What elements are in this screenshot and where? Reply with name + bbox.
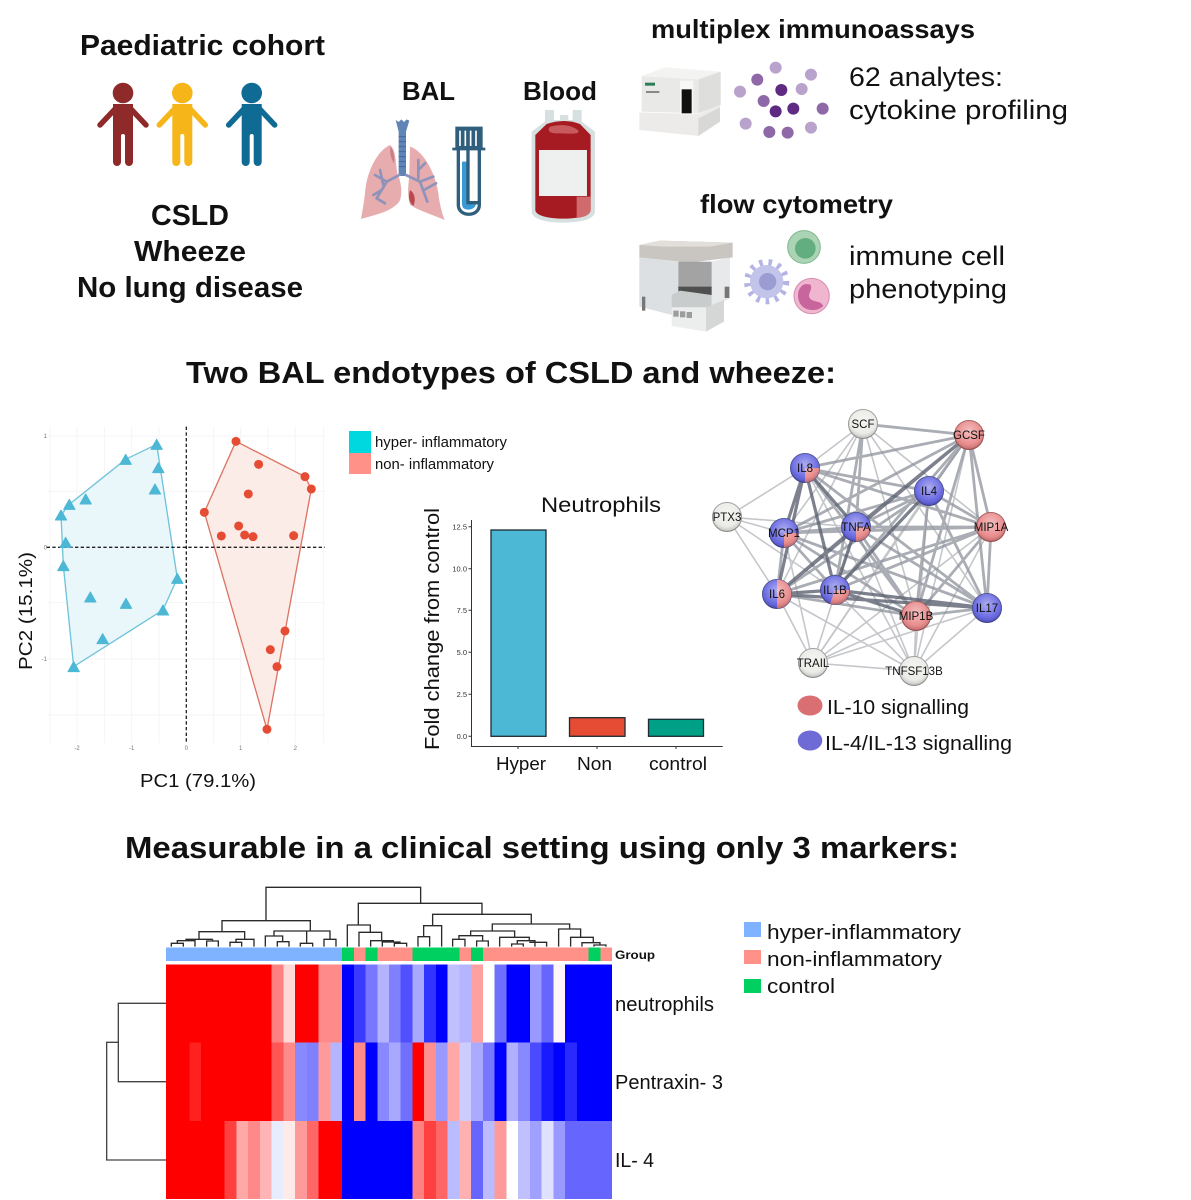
- row labels: [615, 994, 723, 1172]
- text: immune cell phenotyping: immune cell: [849, 241, 1005, 271]
- node: TRAIL: [797, 648, 830, 678]
- icon: sample tube: [452, 127, 485, 214]
- node: MCP1: MCP1: [768, 528, 800, 540]
- bar: non: [570, 718, 625, 736]
- legend: signalling pathways: [798, 696, 1012, 755]
- axis tick labels: [42, 434, 298, 752]
- node: IL4: IL4: [921, 486, 938, 498]
- node: IL1B: [820, 576, 850, 604]
- row labels: IL- 4: [615, 1150, 654, 1172]
- chart: protein interaction network: [712, 410, 1009, 686]
- network edges: [727, 424, 991, 671]
- dendrogram: markers: [107, 1003, 166, 1160]
- node: TNFA: TNFA: [841, 522, 871, 534]
- node: MIP1A: MIP1A: [974, 522, 1009, 534]
- legend: heatmap groups: hyper-inflammatory: [767, 922, 961, 944]
- hull: hyper-inflammatory: [61, 444, 177, 667]
- chart: PCA scatter: [42, 427, 325, 752]
- node: MIP1A: [974, 512, 1009, 542]
- heading: flow cytometry: flow cytometry: [700, 189, 894, 219]
- axis label: PC2: PC2 (15.1%): [15, 552, 36, 670]
- icon: child blue: [229, 83, 275, 166]
- axis tick labels: -2: [74, 746, 80, 752]
- node: GCSF: GCSF: [953, 430, 985, 442]
- legend: heatmap groups: [744, 922, 961, 998]
- legend: heatmap groups: control: [767, 976, 835, 998]
- icon: blood bag: [532, 110, 595, 223]
- icon: immune cells: [750, 231, 829, 314]
- text: immune cell phenotyping: phenotyping: [849, 274, 1007, 304]
- node: PTX3: PTX3: [713, 512, 741, 524]
- y tick labels: 2.5: [457, 690, 467, 699]
- node: TNFA: [841, 512, 871, 542]
- axis tick labels: 0: [44, 545, 48, 551]
- node: TRAIL: TRAIL: [797, 658, 830, 670]
- node: SCF: [848, 410, 878, 438]
- icon: neutrophil: [794, 278, 829, 314]
- y tick labels: 5.0: [457, 648, 467, 657]
- text: cohort groups: Wheeze: [134, 236, 246, 268]
- node: MIP1B: [899, 602, 934, 630]
- text: immune cell phenotyping: [849, 241, 1007, 304]
- axis tick labels: -1: [42, 657, 48, 663]
- heatmap row: pentraxin-3: [166, 1043, 612, 1121]
- node: IL17: IL17: [976, 603, 998, 615]
- heading: two BAL endotypes: Two BAL endotypes of CSLD and wheeze:: [186, 355, 836, 390]
- x labels: Non: [577, 754, 612, 774]
- axis label: fold change: Fold change from control: [422, 508, 444, 750]
- icon: multiplex analyser: [639, 67, 721, 136]
- bar: hyper: [491, 530, 546, 736]
- text: 62 analytes: cytokine profiling: [849, 95, 1068, 125]
- y tick labels: 12.5: [452, 522, 467, 532]
- x labels: control: [649, 754, 707, 774]
- icon: beads: [734, 62, 829, 139]
- heading: Blood: Blood: [523, 76, 597, 106]
- y tick labels: 0.0: [457, 732, 467, 741]
- legend: signalling pathways: IL-10 signalling: [827, 697, 969, 719]
- icon: child yellow: [159, 83, 205, 166]
- node: IL4: [914, 476, 944, 506]
- axis tick labels: 1: [239, 746, 243, 752]
- legend: PCA endotypes: hyper- inflammatory: [375, 435, 508, 451]
- node: IL8: IL8: [797, 463, 813, 475]
- x labels: [496, 754, 707, 774]
- node: IL8: [790, 454, 820, 482]
- node: IL1B: IL1B: [823, 585, 847, 597]
- axis label: PC1: PC1 (79.1%): [140, 770, 256, 791]
- axis tick labels: 2: [294, 746, 298, 752]
- icon: lymphocyte: [788, 231, 820, 263]
- heading: BAL: BAL: [402, 76, 455, 106]
- text: cohort groups: No lung disease: [77, 272, 303, 304]
- heatmap: three markers: [166, 964, 612, 1199]
- legend: PCA endotypes: [349, 431, 508, 474]
- node: IL17: [972, 594, 1002, 622]
- y tick labels: 7.5: [457, 606, 467, 615]
- node: TNFSF13B: [885, 656, 943, 686]
- heading: multiplex immunoassays: multiplex immunoassays: [651, 14, 975, 44]
- text: cohort groups: [77, 200, 303, 304]
- text: 62 analytes: [849, 62, 1068, 125]
- axis tick labels: 0: [185, 746, 189, 752]
- icon: flow cytometer: [639, 241, 733, 332]
- icon: dendritic cell: [750, 265, 783, 298]
- axis tick labels: 1: [44, 434, 48, 440]
- heading: measurable in a clinical setting: Measurable in a clinical setting using only 3 markers:: [125, 830, 959, 865]
- icon: child red: [100, 83, 146, 166]
- hull: non-inflammatory: [204, 441, 311, 729]
- node: MIP1B: MIP1B: [899, 611, 934, 623]
- node: TNFSF13B: TNFSF13B: [885, 666, 943, 678]
- dendrogram: samples: [171, 887, 606, 947]
- annotation bar: sample groups: [166, 948, 612, 961]
- row labels: Pentraxin- 3: [615, 1072, 723, 1094]
- text: cohort groups: CSLD: [151, 200, 229, 232]
- heatmap row: neutrophils: [166, 964, 612, 1043]
- heading: paediatric cohort: Paediatric cohort: [80, 30, 325, 62]
- legend: signalling pathways: IL-4/IL-13 signalling: [825, 733, 1012, 755]
- legend: PCA endotypes: non- inflammatory: [375, 457, 495, 473]
- icon: lungs: [361, 119, 445, 220]
- chart title: neutrophils: Neutrophils: [541, 493, 661, 517]
- node: MCP1: [768, 518, 800, 548]
- points: hyper-inflammatory triangles: [55, 439, 183, 672]
- node: SCF: SCF: [852, 419, 874, 431]
- node: IL6: IL6: [769, 589, 785, 601]
- icon: three children: [100, 83, 275, 166]
- points: non-inflammatory circles: [200, 437, 316, 734]
- heatmap row: IL-4: [166, 1121, 612, 1199]
- node: IL6: [762, 580, 792, 608]
- legend: heatmap groups: non-inflammatory: [767, 949, 942, 971]
- x labels: Hyper: [496, 754, 546, 774]
- y tick labels: 10.0: [452, 564, 467, 574]
- chart: neutrophil bar chart: [452, 520, 723, 774]
- axis tick labels: -1: [129, 746, 135, 752]
- text: 62 analytes: 62 analytes:: [849, 62, 1003, 92]
- row labels: neutrophils: [615, 994, 714, 1016]
- label: group: Group: [615, 948, 655, 962]
- node: GCSF: [953, 420, 985, 450]
- bar: control: [648, 719, 704, 736]
- y tick labels: [452, 522, 467, 741]
- node: PTX3: [712, 502, 742, 532]
